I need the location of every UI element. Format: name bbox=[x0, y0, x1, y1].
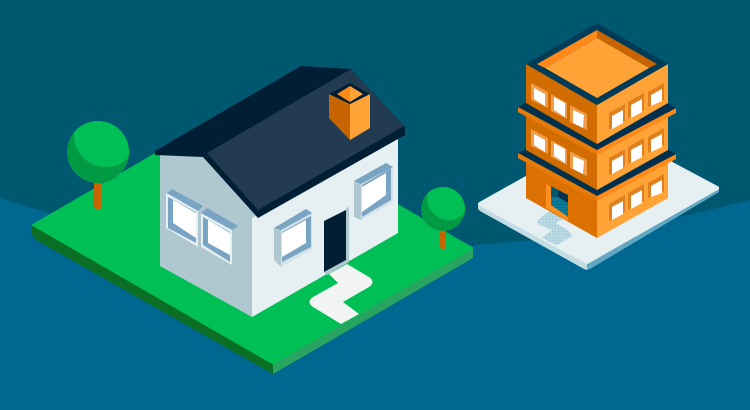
chimney opening right bbox=[350, 86, 363, 102]
middle floor bbox=[526, 110, 668, 190]
roof parapet bbox=[526, 23, 668, 105]
right wall bbox=[252, 134, 398, 317]
background foreground hill bbox=[0, 198, 750, 410]
door bbox=[324, 207, 349, 275]
left tree bbox=[67, 121, 129, 209]
roof bbox=[526, 23, 668, 105]
top floor bbox=[526, 64, 668, 144]
lawn left side bbox=[31, 225, 273, 374]
platform path bbox=[537, 211, 572, 245]
canopy shade bbox=[421, 187, 465, 231]
trunk bbox=[440, 225, 446, 249]
apartment building bbox=[518, 23, 676, 238]
top right windows bbox=[609, 83, 664, 130]
garden path bbox=[310, 264, 372, 324]
platform right side bbox=[587, 188, 719, 270]
right window two bbox=[354, 163, 393, 220]
parapet inner left wall bbox=[537, 30, 597, 68]
lawn top bbox=[32, 109, 473, 364]
right window one bbox=[274, 209, 312, 267]
house lawn bbox=[31, 109, 473, 374]
chimney rim bbox=[329, 83, 370, 104]
apartment platform bbox=[478, 131, 719, 270]
entrance door bbox=[546, 184, 568, 221]
middle right windows bbox=[609, 128, 664, 175]
canopy light bbox=[74, 121, 129, 167]
chimney bbox=[329, 83, 370, 140]
roof deck bbox=[545, 38, 649, 98]
parapet inner right wall bbox=[597, 30, 657, 68]
canopy shade bbox=[67, 121, 129, 183]
lawn right side bbox=[273, 248, 473, 374]
middle left windows bbox=[531, 129, 587, 176]
lower ledge bbox=[518, 110, 676, 201]
roof dark overhang bbox=[155, 66, 405, 218]
left window one bbox=[166, 189, 203, 247]
left wall bbox=[160, 155, 258, 317]
upper ledge bbox=[518, 64, 676, 155]
canopy light bbox=[427, 187, 465, 220]
ground windows bbox=[609, 174, 664, 221]
top left windows bbox=[531, 83, 587, 130]
roof bbox=[155, 66, 405, 218]
roof slate plane bbox=[207, 69, 404, 210]
chimney right face bbox=[350, 94, 370, 140]
ground floor bbox=[526, 152, 668, 238]
platform left side bbox=[478, 205, 587, 270]
left window two bbox=[201, 208, 238, 265]
chimney opening left bbox=[337, 86, 350, 102]
house bbox=[155, 66, 405, 324]
trunk bbox=[94, 175, 102, 209]
chimney left face bbox=[329, 94, 350, 140]
right tree bbox=[421, 187, 465, 249]
platform top bbox=[480, 131, 717, 262]
